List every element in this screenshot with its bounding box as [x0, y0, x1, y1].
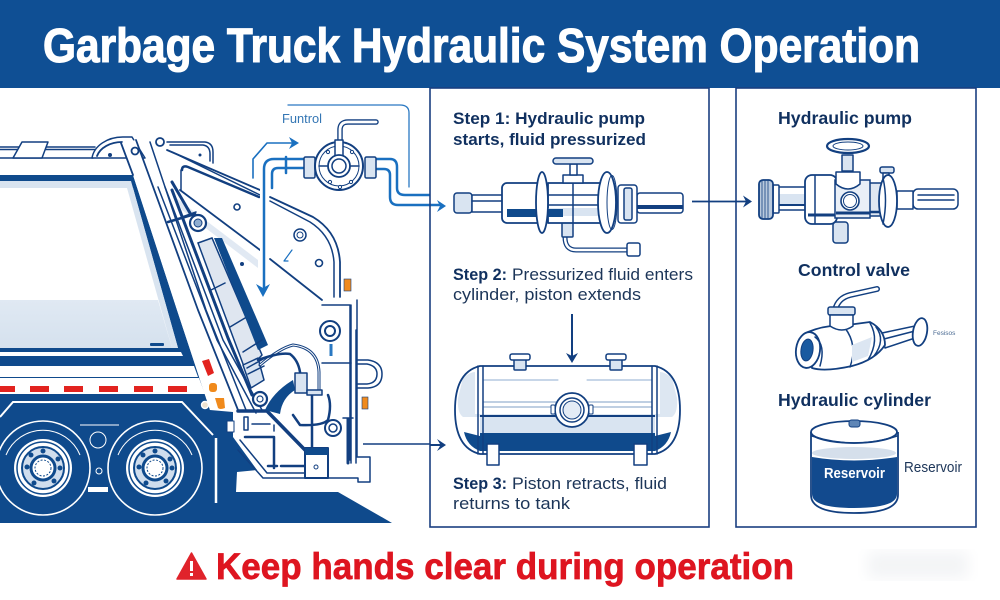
- icon: reservoir: [811, 420, 898, 513]
- roof rails and hatch: [0, 137, 213, 163]
- hydraulic cylinders: [158, 182, 268, 413]
- beam and pillar: [121, 138, 246, 410]
- step 2 text: Step 2:: [453, 266, 507, 284]
- panel: components: [736, 88, 976, 527]
- valve label: Funtrol: [282, 112, 322, 126]
- step 1 text: [453, 110, 646, 149]
- icon: warning triangle: [177, 553, 206, 579]
- arrow: truck to tank: [430, 439, 446, 451]
- truck body and chassis: [0, 158, 392, 523]
- smudge: [868, 552, 968, 578]
- panel: truck illustration: [0, 137, 430, 523]
- valve handle: [340, 122, 376, 146]
- small valve label: Fesisos: [933, 330, 956, 337]
- lift arm plate: [167, 150, 351, 300]
- valve body: [304, 140, 376, 190]
- gap in plate behind pipe: [260, 186, 269, 266]
- rear lights: [202, 359, 225, 409]
- step 3 text: [453, 475, 667, 513]
- reservoir tank label: Reservoir: [824, 466, 885, 482]
- fender outline: [0, 402, 216, 503]
- step 3 text: Step 3:: [453, 475, 507, 493]
- arrow: step 2 to tank: [566, 314, 578, 363]
- step 2 text: [453, 266, 693, 304]
- reservoir side label: Reservoir: [904, 460, 962, 476]
- icon: hydraulic tank: [455, 354, 680, 465]
- control valve on hydraulic lines: [253, 105, 446, 297]
- step 1 text: Step 1: Hydraulic pump: [453, 110, 645, 128]
- panel: steps: [430, 88, 709, 527]
- step 3 text: returns to tank: [453, 495, 571, 513]
- warning text: Keep hands clear during operation: [216, 546, 794, 587]
- step 2 text: cylinder, piston extends: [453, 286, 641, 304]
- heading: hydraulic pump: Hydraulic pump: [778, 108, 912, 128]
- heading: control valve: Control valve: [798, 260, 910, 280]
- rear wheel two: [108, 421, 202, 515]
- step 2 text: Pressurized fluid enters: [512, 266, 693, 284]
- arrow: step panel to components: [692, 196, 752, 208]
- icon: control valve: [794, 289, 929, 370]
- icon: hydraulic pump step 1: [454, 158, 683, 256]
- warning message: [177, 546, 794, 587]
- icon: hydraulic pump: [759, 139, 958, 243]
- hoses and rear frame: [227, 300, 382, 482]
- heading: hydraulic cylinder: Hydraulic cylinder: [778, 390, 931, 410]
- step 1 text: starts, fluid pressurized: [453, 131, 646, 149]
- blue hydraulic pipes: [253, 105, 446, 297]
- rear wheel one: [0, 421, 90, 515]
- header banner: [0, 0, 1000, 88]
- bottom frame line: [363, 443, 430, 445]
- step 3 text: Piston retracts, fluid: [512, 475, 667, 493]
- reflector stripe: [0, 386, 187, 392]
